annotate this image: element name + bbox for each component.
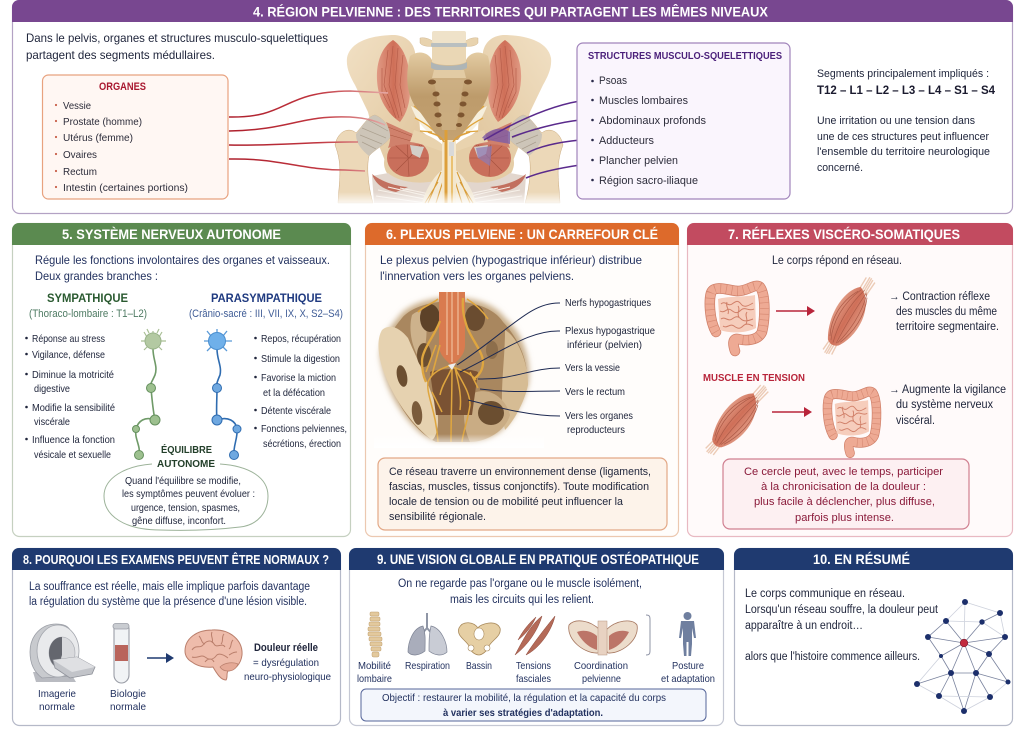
parasympathique list: Détente viscérale	[261, 405, 331, 417]
panel 4: région pelvienne	[12, 0, 1013, 214]
panel 5: système nerveux autonome	[12, 223, 351, 536]
pelvis illustration	[330, 31, 570, 206]
summary text	[745, 588, 939, 663]
segments text: Segments principalement impliqués :	[817, 68, 989, 80]
parasympathique list: Fonctions pelviennes,	[261, 423, 347, 435]
heading 7	[687, 223, 1013, 245]
sympathique heading: SYMPATHIQUE	[47, 291, 128, 305]
heading 4	[12, 0, 1013, 22]
heading 8	[12, 548, 341, 570]
parasympathique heading: PARASYMPATHIQUE	[211, 291, 322, 305]
box: organes: Prostate (homme)	[63, 116, 142, 128]
callout: réseau dense: fascias, muscles, tissus conjonctifs). Toute modification	[389, 481, 649, 493]
arrow	[147, 653, 174, 663]
callout: réseau dense: Ce réseau traverre un environnement dense (ligaments,	[389, 466, 651, 478]
intro text: partagent des segments médullaires.	[26, 48, 215, 62]
icon: muscle 2	[697, 377, 776, 462]
intro text	[398, 578, 642, 606]
text: contraction réflexe: → Contraction réflexe	[889, 291, 990, 303]
callout: chronicisation: parfois plus intense.	[795, 512, 894, 524]
callout: chronicisation: à la chronicisation de la douleur :	[761, 481, 926, 493]
box: structures musculo-squelettiques: Muscles lombaires	[599, 95, 688, 107]
callout: chronicisation: Ce cercle peut, avec le temps, participer	[744, 466, 943, 478]
parasympathique list: Favorise la miction	[261, 372, 336, 384]
parasympathique heading	[189, 291, 343, 320]
sympathique list	[25, 333, 115, 461]
plexus labels	[565, 297, 655, 436]
icon: test tube	[113, 624, 129, 683]
icon: muscle 1	[813, 270, 883, 361]
box: structures musculo-squelettiques: STRUCTURES MUSCULO-SQUELETTIQUES	[588, 50, 782, 62]
box: structures musculo-squelettiques: Adducteurs	[599, 135, 654, 147]
sympathique list: Modifie la sensibilité	[32, 402, 115, 414]
callout: chronicisation	[723, 459, 969, 529]
text: contraction réflexe	[889, 291, 999, 333]
labels row: Posture	[672, 660, 704, 672]
intro text: l'innervation vers les organes pelviens.	[380, 269, 574, 283]
box: structures musculo-squelettiques: Psoas	[599, 75, 627, 87]
segments text: l'ensemble du territoire neurologique	[817, 146, 990, 158]
segments text: une de ces structures peut influencer	[817, 131, 989, 143]
sympathique list: vésicale et sexuelle	[34, 449, 111, 461]
labels row: pelvienne	[582, 673, 621, 685]
intro text: la régulation du système que la présence d'une lésion visible.	[29, 596, 307, 608]
box: organes: ORGANES	[99, 81, 146, 93]
plexus labels: reproducteurs	[567, 424, 625, 436]
sympathique list: Réponse au stress	[32, 333, 105, 345]
équilibre autonome bubble	[104, 443, 268, 530]
intro text: Dans le pelvis, organes et structures musculo-squelettiques	[26, 31, 328, 45]
text: douleur réelle: neuro-physiologique	[244, 671, 331, 683]
plexus labels: Vers le rectum	[565, 386, 625, 398]
summary text: alors que l'histoire commence ailleurs.	[745, 651, 920, 663]
équilibre autonome bubble: ÉQUILIBRE	[161, 443, 212, 456]
label: imagerie	[38, 688, 76, 713]
icon: fascia	[515, 616, 555, 655]
label: biologie: normale	[110, 701, 146, 713]
parasympathique list: sécrétions, érection	[263, 438, 341, 450]
labels row: et adaptation	[661, 673, 715, 685]
purple connection lines	[484, 101, 580, 178]
panel 10: en résumé	[734, 548, 1013, 726]
text: douleur réelle: Douleur réelle	[254, 642, 318, 654]
arrow 1	[776, 306, 815, 316]
heading 8: 8. POURQUOI LES EXAMENS PEUVENT ÊTRE NORMAUX ?	[23, 552, 329, 567]
intro text: mais les circuits qui les relient.	[450, 594, 594, 606]
intro text: La souffrance est réelle, mais elle implique parfois davantage	[29, 581, 310, 593]
équilibre autonome bubble: AUTONOME	[157, 458, 215, 470]
labels row: Coordination	[574, 660, 628, 672]
heading 10	[734, 548, 1013, 570]
label: biologie: Biologie	[110, 688, 146, 700]
label: muscle en tension: MUSCLE EN TENSION	[703, 372, 805, 384]
labels row: Tensions	[516, 660, 551, 672]
text: augmente la vigilance: du système nerveux	[896, 399, 993, 411]
sympathique list: Diminue la motricité	[32, 369, 114, 381]
box: structures musculo-squelettiques	[577, 43, 790, 199]
labels row: Respiration	[405, 660, 450, 672]
heading 9	[349, 548, 724, 570]
plexus labels: Plexus hypogastrique	[565, 325, 655, 337]
summary text: Le corps communique en réseau.	[745, 588, 905, 600]
icon: blue neuron	[204, 329, 241, 460]
sympathique list: Vigilance, défense	[32, 349, 105, 361]
intro text: Le plexus pelvien (hypogastrique inférieur) distribue	[380, 253, 642, 267]
intro text: Le corps répond en réseau.	[772, 255, 902, 267]
heading 7: 7. RÉFLEXES VISCÉRO-SOMATIQUES	[728, 226, 960, 242]
callout: chronicisation: plus facile à déclencher, plus diffuse,	[754, 496, 935, 508]
heading 10: 10. EN RÉSUMÉ	[813, 551, 910, 567]
intro text	[35, 253, 330, 283]
intro text: Régule les fonctions involontaires des organes et vaisseaux.	[35, 253, 330, 267]
icon: intestine 2	[827, 392, 877, 453]
plexus labels: Nerfs hypogastriques	[565, 297, 651, 309]
callout: réseau dense	[378, 458, 667, 530]
box: organes: Utérus (femme)	[63, 132, 133, 144]
équilibre autonome bubble: Quand l'équilibre se modifie,	[125, 475, 241, 487]
icon: brain	[185, 630, 242, 680]
segments text: T12 – L1 – L2 – L3 – L4 – S1 – S4	[817, 83, 995, 97]
box: structures musculo-squelettiques: Abdominaux profonds	[599, 115, 706, 127]
callout: réseau dense: locale de tension ou de mobilité peut influencer la	[389, 496, 624, 508]
plexus labels: inférieur (pelvien)	[567, 339, 642, 351]
callout: objectif: à varier ses stratégies d'adaptation.	[443, 707, 603, 719]
intro text: On ne regarde pas l'organe ou le muscle isolément,	[398, 578, 642, 590]
parasympathique list: Repos, récupération	[261, 333, 341, 345]
box: organes: Vessie	[63, 100, 91, 112]
text: augmente la vigilance: viscéral.	[896, 415, 935, 427]
labels row: lombaire	[357, 673, 392, 685]
icon: IRM scanner	[30, 624, 95, 682]
label: biologie	[110, 688, 146, 713]
text: augmente la vigilance: → Augmente la vigilance	[889, 384, 1006, 396]
red connection lines	[229, 91, 388, 171]
box: structures musculo-squelettiques: Plancher pelvien	[599, 155, 678, 167]
callout: objectif: Objectif : restaurer la mobilité, la régulation et la capacité du corps	[382, 692, 666, 704]
plexus illustration	[374, 292, 544, 448]
icon: green neuron	[132, 329, 166, 460]
bracket	[646, 615, 650, 655]
labels row: Mobilité	[358, 660, 391, 672]
segments text: concerné.	[817, 162, 863, 174]
callout: objectif	[361, 689, 706, 721]
intro text	[29, 581, 310, 608]
heading 5	[12, 223, 351, 245]
text: contraction réflexe: des muscles du même	[896, 306, 997, 318]
parasympathique heading: (Crânio-sacré : III, VII, IX, X, S2–S4)	[189, 308, 343, 320]
icon: intestine 1	[710, 286, 764, 351]
callout: réseau dense: sensibilité régionale.	[389, 511, 486, 523]
icon: human figure	[679, 612, 696, 656]
panel 8: pourquoi les examens	[12, 548, 341, 726]
sympathique list: digestive	[34, 383, 70, 395]
icon: spine	[368, 612, 382, 657]
parasympathique list	[254, 333, 347, 450]
network diagram	[914, 599, 1010, 714]
sympathique list: Influence la fonction	[32, 434, 115, 446]
heading 4: 4. RÉGION PELVIENNE : DES TERRITOIRES QUI PARTAGENT LES MÊMES NIVEAUX	[253, 2, 769, 20]
heading 6	[365, 223, 679, 245]
label: imagerie: Imagerie	[38, 688, 76, 700]
sympathique list: viscérale	[34, 416, 70, 428]
panel 6: plexus pelviene	[365, 223, 679, 536]
box: organes	[42, 75, 228, 199]
équilibre autonome bubble: gêne diffuse, inconfort.	[132, 515, 226, 527]
sympathique heading	[29, 291, 147, 320]
text: augmente la vigilance	[889, 384, 1006, 427]
segments text	[817, 68, 995, 174]
panel 7: réflexes viscéro-somatiques	[687, 223, 1013, 536]
summary text: Lorsqu'un réseau souffre, la douleur peut	[745, 604, 939, 616]
summary text: apparaître à un endroit…	[745, 620, 863, 632]
label: imagerie: normale	[39, 701, 75, 713]
panel 9: vision globale	[349, 548, 724, 726]
intro text	[26, 31, 328, 62]
labels row: Bassin	[466, 660, 492, 672]
icon: pelvic floor	[569, 621, 637, 655]
plexus labels: Vers les organes	[565, 410, 633, 422]
icon: bassin	[458, 623, 500, 655]
box: structures musculo-squelettiques: Région sacro-iliaque	[599, 175, 698, 187]
box: organes: Ovaires	[63, 149, 97, 161]
leader lines	[457, 303, 560, 416]
intro text	[380, 253, 642, 283]
sympathique heading: (Thoraco-lombaire : T1–L2)	[29, 308, 147, 320]
text: douleur réelle	[244, 642, 331, 683]
heading 6: 6. PLEXUS PELVIENE : UN CARREFOUR CLÉ	[386, 226, 658, 242]
parasympathique list: Stimule la digestion	[261, 353, 340, 365]
text: douleur réelle: = dysrégulation	[253, 657, 319, 669]
parasympathique list: et la défécation	[263, 387, 325, 399]
équilibre autonome bubble: urgence, tension, spasmes,	[131, 502, 240, 514]
heading 9: 9. UNE VISION GLOBALE EN PRATIQUE OSTÉOPATHIQUE	[377, 551, 699, 567]
box: organes: Rectum	[63, 166, 97, 178]
labels row: fasciales	[516, 673, 551, 685]
text: contraction réflexe: territoire segmentaire.	[896, 321, 999, 333]
icon: lungs	[408, 613, 447, 655]
arrow 2	[772, 407, 812, 417]
équilibre autonome bubble: les symptômes peuvent évoluer :	[122, 488, 255, 500]
segments text: Une irritation ou une tension dans	[817, 115, 975, 127]
plexus labels: Vers la vessie	[565, 362, 620, 374]
labels row	[357, 660, 715, 685]
box: organes: Intestin (certaines portions)	[63, 182, 188, 194]
intro text: Deux grandes branches :	[35, 269, 158, 283]
heading 5: 5. SYSTÈME NERVEUX AUTONOME	[62, 226, 281, 242]
